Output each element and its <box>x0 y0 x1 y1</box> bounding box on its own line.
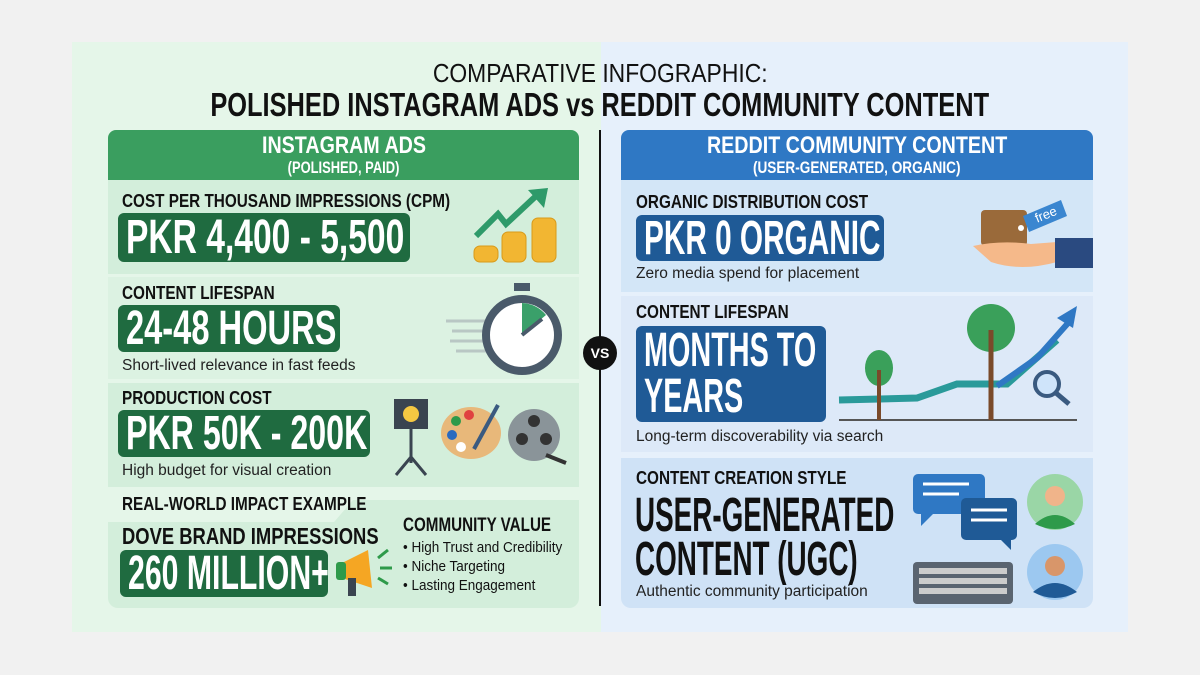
icon: hand with wallet: free <box>1033 203 1059 225</box>
icon: growth chart with trees <box>838 304 1077 421</box>
section: organic cost <box>621 180 1093 292</box>
section: cpm: COST PER THOUSAND IMPRESSIONS (CPM) <box>122 191 450 211</box>
icon: stopwatch <box>446 283 562 375</box>
header: instagram <box>108 130 579 180</box>
section: lifespan reddit: CONTENT LIFESPAN <box>636 302 789 322</box>
section: lifespan reddit: YEARS <box>644 370 743 422</box>
panel: reddit community content <box>621 130 1093 608</box>
text: community value: • Niche Targeting <box>403 558 505 575</box>
background left <box>72 42 601 632</box>
title: POLISHED INSTAGRAM ADS vs REDDIT COMMUNITY CONTENT <box>211 86 989 123</box>
section: production cost: PRODUCTION COST <box>122 388 272 408</box>
section: lifespan: Short-lived relevance in fast feeds <box>122 357 355 374</box>
section: real-world impact: DOVE BRAND IMPRESSIONS <box>122 523 379 549</box>
panel: instagram ads <box>108 130 579 608</box>
vs badge <box>583 336 617 370</box>
section: real-world impact: REAL-WORLD IMPACT EXAMPLE <box>122 494 367 514</box>
section: content creation style: Authentic community participation <box>636 583 868 600</box>
section: content creation style <box>621 458 1093 608</box>
section: organic cost: Zero media spend for placement <box>636 265 859 282</box>
header: reddit <box>621 130 1093 180</box>
section: lifespan reddit: Long-term discoverability via search <box>636 428 883 445</box>
section: content creation style: CONTENT CREATION STYLE <box>636 468 847 488</box>
text: community value: • High Trust and Credibility <box>403 539 562 556</box>
section: organic cost: ORGANIC DISTRIBUTION COST <box>636 192 868 212</box>
header: instagram: (POLISHED, PAID) <box>288 158 399 177</box>
icon: hand with wallet <box>973 200 1093 268</box>
text: community value <box>403 515 562 594</box>
divider <box>599 130 601 606</box>
icon: coins and arrow <box>474 188 556 262</box>
section: lifespan reddit <box>621 296 1093 452</box>
section: lifespan: CONTENT LIFESPAN <box>122 283 275 303</box>
icon: megaphone <box>336 548 392 596</box>
title <box>211 58 989 123</box>
background right <box>601 42 1128 632</box>
header: reddit: (USER-GENERATED, ORGANIC) <box>753 158 961 177</box>
section: lifespan <box>108 277 579 379</box>
icon: chat, keyboard, users <box>913 474 1083 604</box>
section: production cost: High budget for visual creation <box>122 462 331 479</box>
icon: production tools <box>394 399 567 476</box>
header: reddit: REDDIT COMMUNITY CONTENT <box>707 132 1007 159</box>
header: instagram: INSTAGRAM ADS <box>262 132 426 159</box>
text: community value: • Lasting Engagement <box>403 577 535 594</box>
vs badge: VS <box>591 345 609 361</box>
section: production cost <box>108 383 579 487</box>
section: real-world impact <box>108 494 579 608</box>
section: content creation style: USER-GENERATED <box>635 489 894 542</box>
section: content creation style: CONTENT (UGC) <box>635 533 858 586</box>
section: cpm <box>108 180 579 274</box>
title: COMPARATIVE INFOGRAPHIC: <box>433 58 767 88</box>
text: community value: COMMUNITY VALUE <box>403 515 551 536</box>
